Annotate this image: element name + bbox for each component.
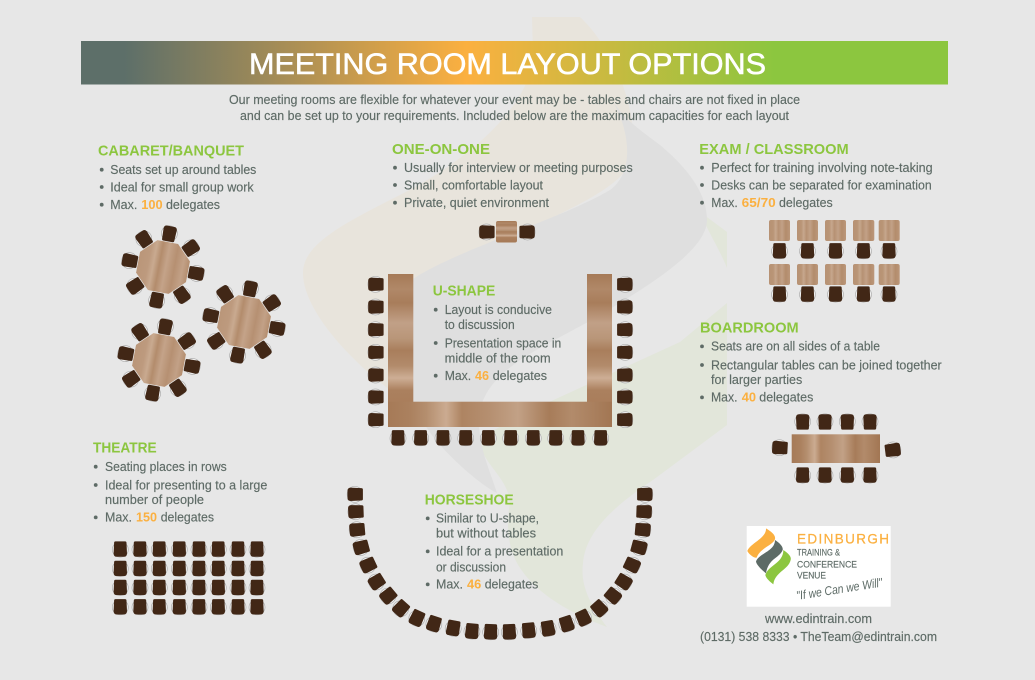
title banner: MEETING ROOM LAYOUT OPTIONS <box>249 48 766 81</box>
list: boardroom: for larger parties <box>711 373 802 387</box>
heading: horseshoe: HORSESHOE <box>425 492 514 509</box>
panel: exam / classroom <box>699 141 933 302</box>
list: horseshoe: but without tables <box>436 527 536 541</box>
list: exam / classroom: Desks can be separated for examination <box>711 178 932 192</box>
list: horseshoe: 46 <box>467 577 481 592</box>
diagram: horseshoe chairs <box>347 486 653 640</box>
list: u-shape <box>434 303 561 383</box>
list: one-on-one <box>393 161 633 210</box>
logo card <box>747 526 891 607</box>
intro text <box>229 93 800 123</box>
intro text: and can be set up to your requirements. Included below are the maximum capacities for each layout <box>240 109 789 123</box>
contact details: www.edintrain.com <box>764 612 872 626</box>
list: horseshoe: Ideal for a presentation <box>436 545 563 559</box>
list: exam / classroom: delegates <box>779 196 833 210</box>
list: boardroom <box>700 340 942 405</box>
diagram: boardroom table <box>771 414 902 483</box>
diagram: cabaret tables <box>116 224 287 403</box>
list: theatre: Ideal for presenting to a large <box>105 478 267 492</box>
list: boardroom: Seats are on all sides of a table <box>711 340 880 354</box>
chairs: u-shape bottom <box>390 430 609 446</box>
panel: one-on-one <box>392 141 633 242</box>
logo wordmark: TRAINING & <box>797 548 841 558</box>
list: exam / classroom: Max. <box>711 196 738 210</box>
list: u-shape: Max. <box>445 369 471 383</box>
list: horseshoe: Max. <box>436 578 463 592</box>
heading: cabaret: CABARET/BANQUET <box>98 143 244 160</box>
list: horseshoe: or discussion <box>436 561 506 575</box>
contact details <box>700 612 937 644</box>
panel: boardroom <box>700 319 942 483</box>
list: u-shape: Presentation space in <box>445 336 561 350</box>
list: cabaret <box>100 163 256 212</box>
list: horseshoe: delegates <box>485 578 538 592</box>
heading: exam / classroom: EXAM / CLASSROOM <box>699 141 849 158</box>
list: cabaret: Seats set up around tables <box>110 163 256 177</box>
title banner <box>81 41 948 84</box>
list: one-on-one: Usually for interview or meeting purposes <box>404 161 633 175</box>
list: cabaret: 100 <box>141 197 163 212</box>
list: one-on-one: Private, quiet environment <box>404 196 549 210</box>
watermark: swoosh logo <box>303 17 727 627</box>
list: u-shape: 46 <box>475 368 489 383</box>
heading: one-on-one: ONE-ON-ONE <box>392 141 490 158</box>
list: boardroom: 40 <box>742 390 756 405</box>
list: horseshoe: Similar to U-shape, <box>436 512 539 526</box>
intro text: Our meeting rooms are flexible for whatever your event may be - tables and chairs are not fixed in place <box>229 93 800 107</box>
list: boardroom: Rectangular tables can be joined together <box>711 358 942 372</box>
logo wordmark: VENUE <box>797 570 826 580</box>
list: theatre <box>94 460 267 525</box>
list: u-shape: delegates <box>493 369 547 383</box>
panel: horseshoe <box>347 486 653 640</box>
diagram: classroom desks <box>769 220 900 302</box>
list: theatre: number of people <box>105 493 204 507</box>
heading: theatre: THEATRE <box>93 439 157 456</box>
list: cabaret: delegates <box>166 198 220 212</box>
list: boardroom: delegates <box>759 391 813 405</box>
logo wordmark: EDINBURGH <box>797 531 889 546</box>
heading: boardroom: BOARDROOM <box>700 319 799 336</box>
panel: theatre <box>93 439 267 615</box>
list: theatre: delegates <box>161 511 214 525</box>
contact details: (0131) 538 8333 • TheTeam@edintrain.com <box>700 630 937 644</box>
list: horseshoe <box>426 512 563 592</box>
list: exam / classroom: 65/70 <box>742 195 776 210</box>
list: boardroom: Max. <box>711 391 738 405</box>
logo wordmark <box>797 531 889 580</box>
logo wordmark: CONFERENCE <box>797 559 857 569</box>
list: exam / classroom: Perfect for training involving note-taking <box>711 161 933 175</box>
chairs: u-shape left <box>368 276 384 428</box>
list: cabaret: Ideal for small group work <box>110 180 254 194</box>
list: theatre: 150 <box>136 510 157 525</box>
list: theatre: Seating places in rows <box>105 460 227 474</box>
list: exam / classroom <box>700 161 933 210</box>
logo tagline: "If we Can we Will" <box>795 575 884 603</box>
list: u-shape: to discussion <box>445 318 515 332</box>
icon: logo swoosh <box>747 528 791 584</box>
list: theatre: Max. <box>105 511 132 525</box>
list: cabaret: Max. <box>110 198 137 212</box>
list: u-shape: middle of the room <box>445 352 551 366</box>
diagram: one-on-one table <box>479 221 535 242</box>
heading: u-shape: U-SHAPE <box>433 283 495 300</box>
list: one-on-one: Small, comfortable layout <box>404 178 543 192</box>
list: u-shape: Layout is conducive <box>445 303 552 317</box>
diagram: u-shape tables <box>388 274 612 427</box>
panel: u-shape <box>368 274 633 446</box>
panel: cabaret / banquet <box>98 143 287 403</box>
diagram: theatre rows <box>112 541 265 615</box>
chairs: u-shape right <box>617 276 633 428</box>
